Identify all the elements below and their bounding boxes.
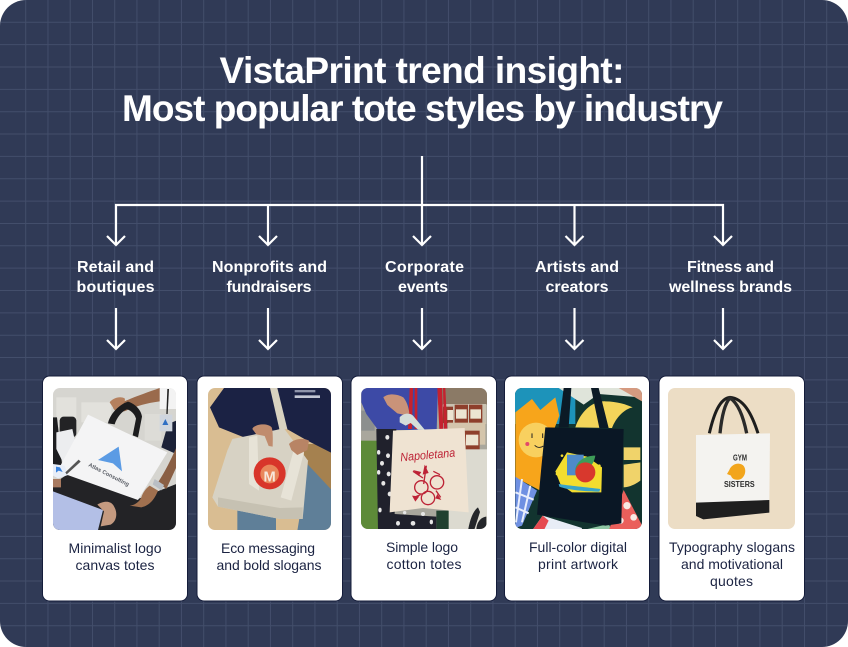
industry label: artists and creators: creators xyxy=(546,279,609,296)
industry label: artists and creators: Artists and xyxy=(535,259,619,276)
title xyxy=(122,50,723,129)
caption: Full-color digital xyxy=(529,539,627,555)
caption: canvas totes xyxy=(76,557,154,573)
photo: white logo tote handed over: Atlas Consulting xyxy=(87,462,130,488)
caption xyxy=(386,539,462,572)
industry label: corporate events xyxy=(385,259,464,296)
title: VistaPrint trend insight: xyxy=(220,50,624,91)
industry label: fitness and wellness brands xyxy=(668,259,792,296)
industry label: retail and boutiques: boutiques xyxy=(76,279,155,296)
arrows from labels to cards xyxy=(107,308,732,349)
caption: cotton totes xyxy=(386,556,462,572)
caption xyxy=(529,539,627,572)
industry label: fitness and wellness brands: wellness brands xyxy=(668,279,792,296)
title: Most popular tote styles by industry xyxy=(122,88,723,129)
industry label: nonprofits and fundraisers: Nonprofits and xyxy=(212,259,327,276)
caption: Typography slogans xyxy=(669,539,795,555)
caption xyxy=(669,539,795,589)
industry label: corporate events: Corporate xyxy=(385,259,464,276)
card: eco messaging and bold slogans xyxy=(197,376,342,601)
industry label: retail and boutiques: Retail and xyxy=(77,259,154,276)
caption: and motivational xyxy=(681,556,783,572)
photo: canvas tote with red badge: M xyxy=(264,469,276,485)
card: simple logo cotton totes xyxy=(351,376,496,601)
industry label: corporate events: events xyxy=(398,279,448,296)
industry label: nonprofits and fundraisers xyxy=(212,259,327,296)
industry label: retail and boutiques xyxy=(76,259,155,296)
card: full-color digital print artwork xyxy=(504,376,650,601)
industry label: fitness and wellness brands: Fitness and xyxy=(687,259,774,276)
industry label: nonprofits and fundraisers: fundraisers xyxy=(226,279,312,296)
industry label: artists and creators xyxy=(535,259,619,296)
photo: cotton tote at market xyxy=(361,388,487,529)
photo: cotton tote at market: Napoletana xyxy=(400,446,456,464)
photo: gym sisters tote on beige: GYM xyxy=(733,454,747,463)
photo: black tote with colorful artwork xyxy=(515,388,642,529)
photo: canvas tote with red badge xyxy=(208,388,331,530)
caption: Minimalist logo xyxy=(68,540,162,556)
photo: gym sisters tote on beige xyxy=(668,388,795,529)
caption: and bold slogans xyxy=(216,557,322,573)
caption xyxy=(68,540,162,573)
caption: Simple logo xyxy=(386,539,458,555)
caption: Eco messaging xyxy=(221,540,315,556)
photo: white logo tote handed over xyxy=(53,388,176,530)
caption: print artwork xyxy=(538,556,619,572)
photo: gym sisters tote on beige: SISTERS xyxy=(724,480,755,489)
card: typography slogans and motivational quotes xyxy=(659,376,804,601)
branching connector arrows xyxy=(107,156,732,245)
caption xyxy=(216,540,322,573)
card: minimalist logo canvas totes xyxy=(42,376,188,601)
caption: quotes xyxy=(710,573,753,589)
